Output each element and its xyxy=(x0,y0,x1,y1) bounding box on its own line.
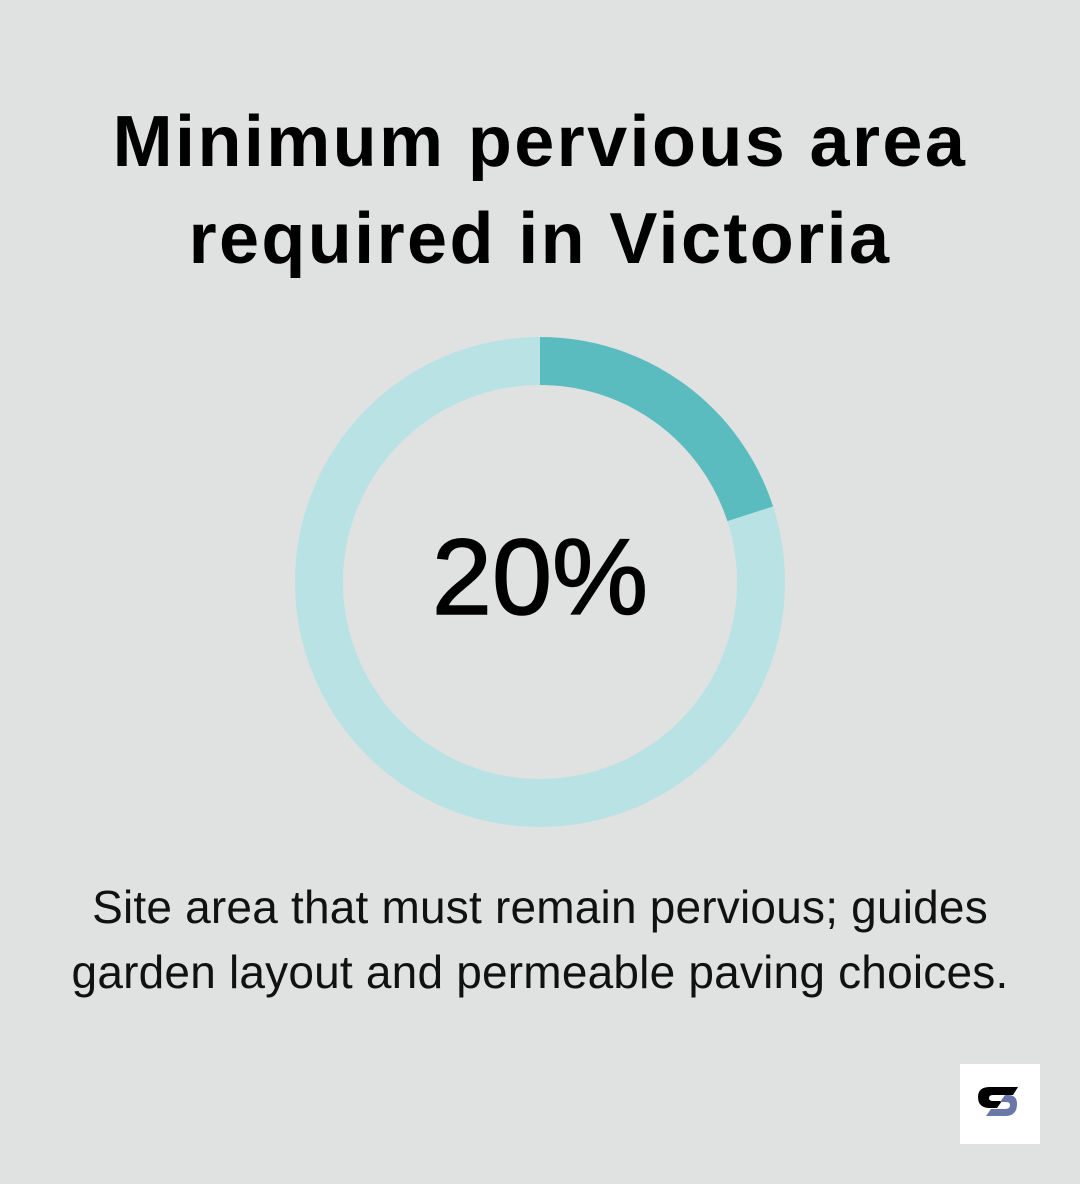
description: Site area that must remain pervious; guides xyxy=(92,881,988,933)
title: Minimum pervious area xyxy=(113,102,967,182)
donut chart: 20% xyxy=(432,516,648,637)
logo xyxy=(960,1064,1040,1144)
title xyxy=(113,102,967,279)
description xyxy=(72,881,1008,998)
title: required in Victoria xyxy=(189,199,891,279)
description: garden layout and permeable paving choices. xyxy=(72,946,1008,998)
